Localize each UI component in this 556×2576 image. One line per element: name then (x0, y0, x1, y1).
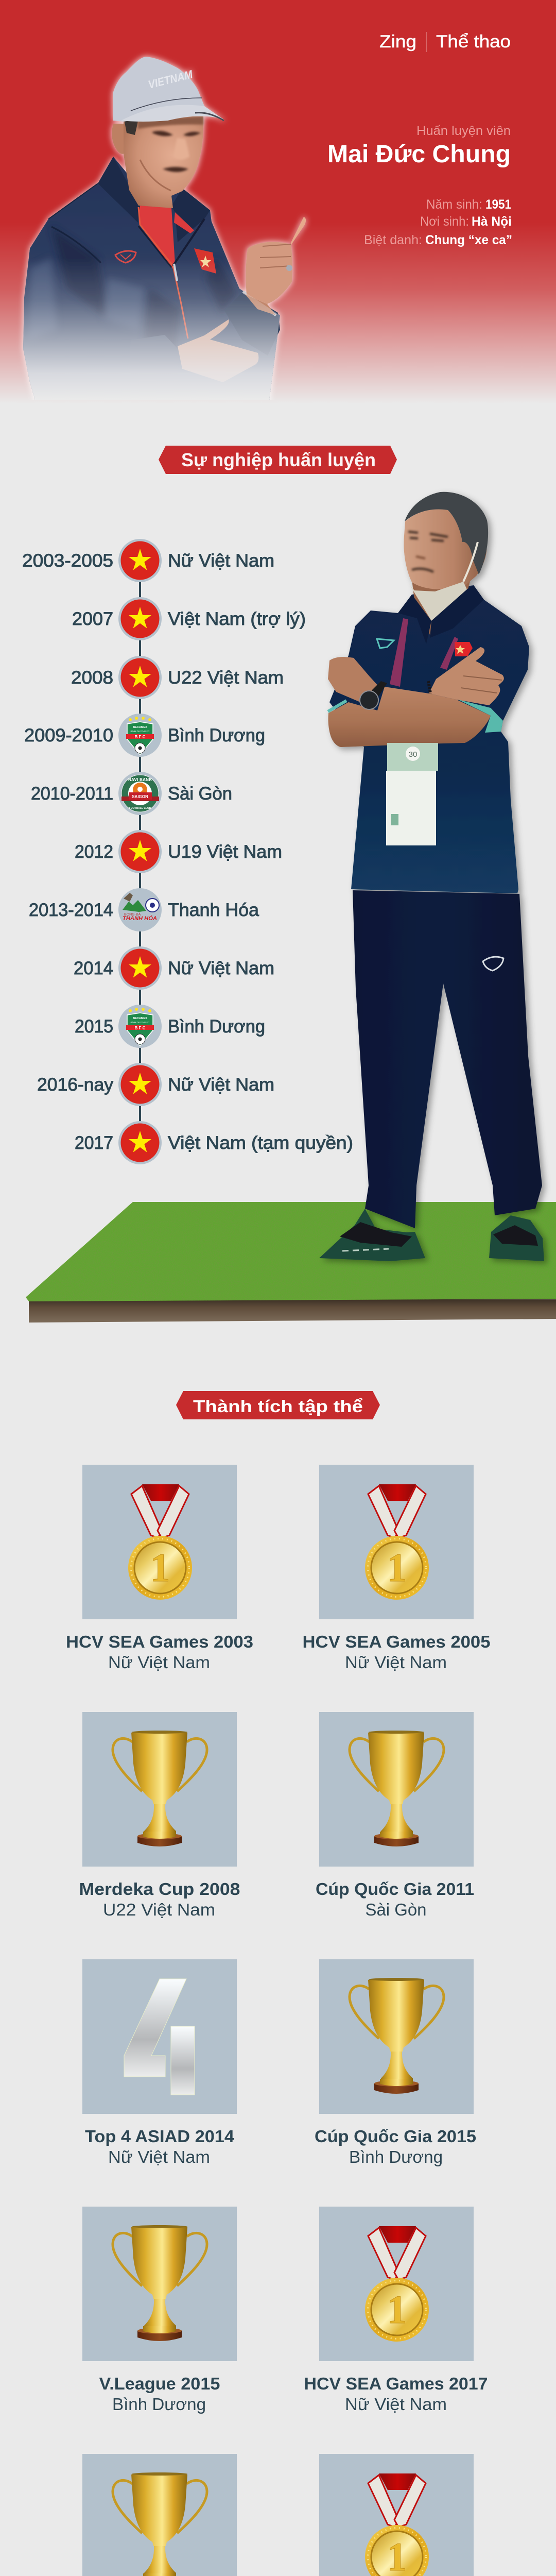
timeline row: 2009-2010 Bình Dương: 2009-2010 (24, 725, 113, 745)
achievement card: Cúp Quốc Gia 2011: Sài Gòn (366, 1900, 426, 1919)
jacket shading (51, 229, 237, 345)
brand label: Zing | Thể thao (379, 32, 511, 52)
timeline row: 2012 U19 Việt Nam (75, 830, 282, 873)
birth year: 1951 (485, 197, 511, 212)
ear (112, 124, 126, 154)
nickname: Biệt danh: (364, 233, 422, 247)
achievement card: HCV SEA Games 2003: Nữ Việt Nam (108, 1653, 210, 1672)
timeline row: 2008 U22 Việt Nam: 2008 (71, 668, 113, 688)
birth place: Hà Nội (472, 214, 512, 229)
achievement card: HCV SEA Games 2017: Nữ Việt Nam (345, 2395, 447, 2414)
achievement card: HCV SEA Games 2005 (303, 1465, 490, 1672)
timeline row: 2012 U19 Việt Nam: U19 Việt Nam (168, 842, 282, 862)
wristwatch (360, 681, 387, 709)
achievement card: Merdeka Cup 2008: U22 Việt Nam (103, 1900, 215, 1919)
achievement card: Cúp Quốc Gia 2015 (315, 1959, 476, 2166)
photo illustration: coach in cap and jacket (21, 57, 306, 412)
eyes, nose and mouth (408, 532, 448, 572)
right shoe (489, 1215, 544, 1261)
achievement card: Merdeka Cup 2008 (79, 1712, 240, 1919)
achievement card: HCV SEA Games 2003 (66, 1465, 253, 1672)
neck (412, 577, 471, 635)
raised hand (291, 217, 306, 245)
achievement card: Merdeka Cup 2008: Merdeka Cup 2008 (79, 1879, 240, 1899)
face and neck (124, 116, 203, 208)
achievement card: Top 4 ASIAD 2014: Nữ Việt Nam (108, 2147, 210, 2166)
shirt collar (398, 585, 484, 644)
nickname (364, 233, 512, 247)
side hair (125, 121, 138, 135)
achievement card: HCV SEA Games 2017 (304, 2207, 488, 2414)
icon: gold trophy (350, 1978, 444, 2094)
cap (113, 57, 204, 122)
header panel (0, 0, 556, 412)
coach title: Huấn luyện viên (416, 124, 511, 138)
chest flag (455, 642, 473, 656)
icon: gold trophy (113, 2472, 207, 2576)
timeline row: 2013-2014 Thanh Hóa: 2013-2014 (29, 900, 113, 920)
timeline row: 2016-nay Nữ Việt Nam: Nữ Việt Nam (168, 1075, 274, 1095)
timeline row: 2010-2011 Sài Gòn: 2010-2011 (31, 784, 113, 804)
icon: Navi Bank Sài Gòn club crest: SAIGON (132, 794, 148, 799)
face mask (409, 582, 467, 621)
photo illustration: coach in cap and jacket: VIETNAM (147, 67, 194, 91)
timeline row: 2016-nay Nữ Việt Nam: 2016-nay (37, 1075, 114, 1095)
brand label: Zing | Thể thao: Thể thao (436, 32, 511, 52)
timeline row: 2015 Bình Dương: 2015 (75, 1016, 113, 1037)
coach name: Mai Đức Chung (327, 141, 511, 168)
polo shirt (329, 585, 529, 893)
icon: Navi Bank Sài Gòn club crest: NAVI BANK (128, 777, 152, 782)
grass pitch (26, 1202, 556, 1323)
icon: Bình Dương club crest: BÌNH DƯƠNG FC (131, 730, 150, 733)
achievement card: Cúp Quốc Gia 2011 (316, 1712, 474, 1919)
icon: gold medal: 1 (150, 1545, 170, 1590)
sleeve cuffs (328, 700, 503, 733)
left shoe (319, 1209, 425, 1261)
icon: gold medal (365, 2226, 429, 2342)
timeline row: 2014 Nữ Việt Nam (74, 946, 274, 990)
achievement card: HCV SEA Games 2005: Nữ Việt Nam (345, 1653, 447, 1672)
timeline row: 2017 Việt Nam (tạm quyền): Việt Nam (tạm quyền) (168, 1133, 353, 1153)
icon: Thanh Hóa club logo: BÓNG ĐÁ (124, 912, 141, 917)
nickname: Chung “xe ca” (425, 233, 512, 247)
timeline row: 2007 Việt Nam (trợ lý): Việt Nam (trợ lý) (168, 609, 306, 629)
icon: Thanh Hóa club logo: THANH HÓA (123, 915, 157, 922)
jacket flag patch (194, 248, 216, 274)
bracelet (428, 681, 430, 693)
icon: gold medal (365, 2473, 429, 2576)
timeline row: 2010-2011 Sài Gòn (31, 772, 232, 815)
jacket collar (98, 157, 140, 223)
photo illustration: coach standing with crossed arms (319, 492, 544, 1261)
timeline row: 2003-2005 Nữ Việt Nam: Nữ Việt Nam (168, 551, 274, 571)
icon: Bình Dương club crest: BECAMEX (133, 1017, 147, 1020)
timeline row: 2016-nay Nữ Việt Nam (37, 1063, 274, 1106)
section heading: career: Sự nghiệp huấn luyện (181, 449, 376, 470)
achievement card: V.League 2015: Bình Dương (112, 2395, 206, 2414)
lanyard (390, 618, 458, 687)
timeline row: 2017 Việt Nam (tạm quyền): 2017 (75, 1133, 113, 1153)
trouser logo (483, 957, 503, 971)
icon: gold medal: 1 (387, 1545, 407, 1590)
timeline row: 2014 Nữ Việt Nam: Nữ Việt Nam (168, 958, 274, 978)
icon: gold medal: 1 (387, 2287, 407, 2332)
icon: Navi Bank Sài Gòn club crest: FOOTBALL CLUB (129, 807, 151, 810)
achievement card: Cúp Quốc Gia 2015: Bình Dương (349, 2147, 443, 2166)
birth year: Năm sinh: (426, 197, 482, 212)
timeline row: 2013-2014 Thanh Hóa: Thanh Hóa (168, 900, 259, 920)
red shirt (138, 206, 175, 269)
face (404, 509, 486, 589)
zipper (138, 207, 188, 338)
section heading: career (159, 446, 397, 474)
timeline row: 2015 Bình Dương (75, 1005, 265, 1048)
icon: Bình Dương club crest: BÌNH DƯƠNG FC (131, 1021, 150, 1024)
hair (405, 492, 488, 574)
achievement card: AFF Cup 2019 (82, 2454, 237, 2576)
achievement card: Cúp Quốc Gia 2011: Cúp Quốc Gia 2011 (316, 1879, 474, 1899)
timeline row: 2008 U22 Việt Nam (71, 656, 284, 699)
achievement card: HCV SEA Games 2017: HCV SEA Games 2017 (304, 2374, 488, 2393)
icon: Thanh Hóa club logo (123, 893, 159, 922)
timeline row: 2012 U19 Việt Nam: 2012 (75, 842, 113, 862)
brand label: Zing | Thể thao: Zing (379, 32, 416, 52)
timeline row: 2017 Việt Nam (tạm quyền) (75, 1121, 353, 1164)
timeline row: 2009-2010 Bình Dương (24, 714, 265, 757)
achievement card: Top 4 ASIAD 2014 (82, 1959, 237, 2166)
jacket logo (115, 251, 136, 263)
section heading: team achievements (176, 1391, 380, 1419)
achievement card: V.League 2015: V.League 2015 (99, 2374, 220, 2393)
icon: Navi Bank Sài Gòn club crest (121, 775, 159, 812)
jacket (23, 157, 280, 412)
icon: gold trophy (113, 1731, 207, 1846)
section heading: team achievements: Thành tích tập thể (193, 1397, 363, 1416)
timeline connector (139, 567, 141, 1139)
birth place (420, 214, 512, 229)
icon: silver number four (124, 1979, 195, 2095)
accreditation badge (386, 743, 438, 845)
icon: Bình Dương club crest: B F C (135, 1026, 146, 1030)
birth place: Nơi sinh: (420, 214, 469, 229)
timeline row: 2015 Bình Dương: Bình Dương (168, 1016, 265, 1037)
achievement card: Cúp Quốc Gia 2015: Cúp Quốc Gia 2015 (315, 2127, 476, 2146)
accreditation badge: 30 (409, 750, 417, 759)
achievement card: V.League 2015 (82, 2207, 237, 2414)
timeline row: 2003-2005 Nữ Việt Nam (22, 539, 274, 582)
timeline row: 2013-2014 Thanh Hóa (29, 888, 259, 931)
birth year (426, 197, 511, 212)
icon: gold trophy (113, 2225, 207, 2341)
timeline row: 2009-2010 Bình Dương: Bình Dương (168, 725, 265, 745)
achievement card: HCV SEA Games 2003: HCV SEA Games 2003 (66, 1632, 253, 1651)
timeline row: 2007 Việt Nam (trợ lý) (72, 597, 306, 640)
icon: gold medal (128, 1484, 192, 1600)
career timeline (22, 539, 353, 1164)
timeline row: 2007 Việt Nam (trợ lý): 2007 (72, 609, 113, 629)
achievement card: HCV SEA Games 2005: HCV SEA Games 2005 (303, 1632, 490, 1651)
icon: gold medal (365, 1484, 429, 1600)
sleeve cuff (227, 293, 282, 335)
icon: gold trophy (350, 1731, 444, 1846)
icon: Bình Dương club crest: B F C (135, 735, 146, 739)
trousers (353, 890, 542, 1228)
eyes, nose, mouth (152, 131, 201, 172)
icon: Bình Dương club crest: BECAMEX (133, 726, 147, 729)
crossed arms (328, 647, 504, 747)
timeline row: 2010-2011 Sài Gòn: Sài Gòn (168, 784, 232, 804)
icon: Bình Dương club crest (126, 1008, 154, 1046)
timeline row: 2003-2005 Nữ Việt Nam: 2003-2005 (22, 551, 113, 571)
icon: Bình Dương club crest (126, 717, 154, 755)
white fade over lower figure (23, 263, 280, 400)
achievement card: Top 4 ASIAD 2014: Top 4 ASIAD 2014 (85, 2127, 235, 2146)
timeline row: 2014 Nữ Việt Nam: 2014 (74, 958, 113, 978)
achievement card: HCV SEA Games 2019 (303, 2454, 489, 2576)
timeline row: 2008 U22 Việt Nam: U22 Việt Nam (168, 668, 284, 688)
lower hand (178, 319, 258, 382)
shirt logo (377, 639, 394, 648)
cap shadow on forehead (138, 116, 203, 129)
